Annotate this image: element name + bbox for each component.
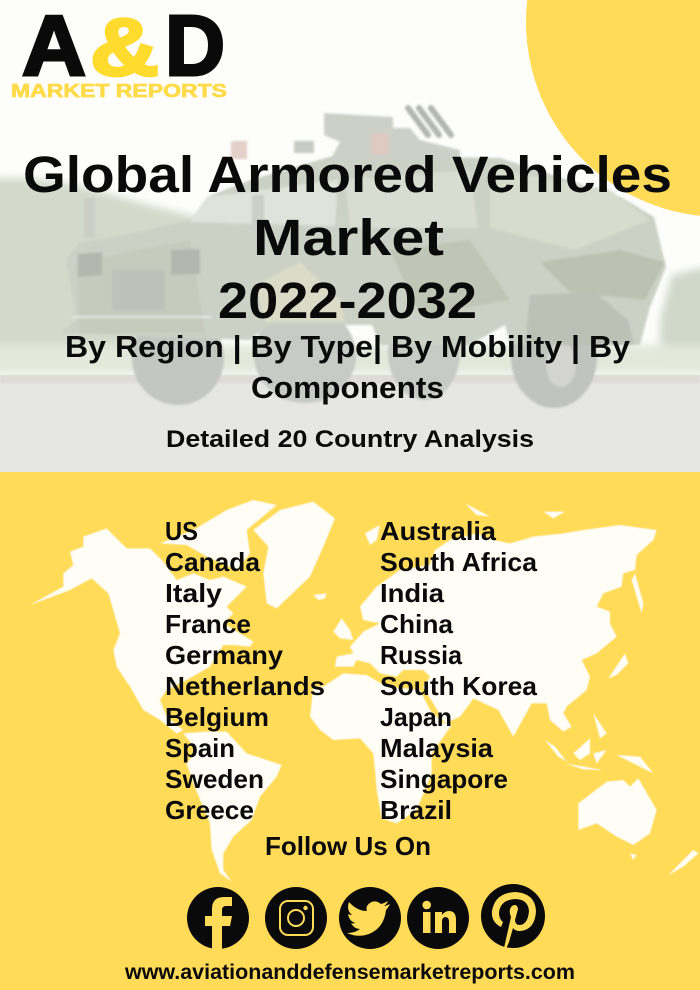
logo: A&D Market Reports [11,0,227,101]
country list: right column: Brazil [380,795,452,825]
country list: left column: Canada [165,547,261,577]
country list: right column: India [380,578,445,608]
country list: right column: Singapore [380,764,508,794]
country list: left column: Belgium [165,702,269,732]
logo: A&D Market Reports: & [90,2,159,93]
panel: faded vehicle photo background [0,0,700,472]
title: 2022-2032 [218,272,477,329]
country list: left column: Germany [165,640,284,670]
follow us heading: Follow Us On [265,831,431,861]
logo: A&D Market Reports: MARKET REPORTS [11,81,227,101]
icon: facebook [187,887,249,949]
title: Market [253,209,444,266]
country list: right column: Australia [380,516,497,546]
logo: A&D Market Reports: A [22,0,86,94]
country list: right column [380,516,538,825]
country list: left column: Spain [165,733,235,763]
icon: instagram [265,887,327,949]
logo: A&D Market Reports: D [165,0,225,94]
country list: left column: US [165,516,198,546]
eastern hemisphere [310,503,698,875]
subtitle: segments: Components [251,370,444,405]
country list: right column: Japan [380,702,452,732]
title [23,146,672,329]
panel: yellow lower section [0,472,700,990]
website url: www.aviationanddefensemarketreports.com [124,961,575,984]
country list: left column [165,516,325,825]
decorative yellow circle, top right [526,0,700,217]
icon: linkedin [407,887,469,949]
western hemisphere [30,500,353,882]
world map [30,500,698,882]
country list: right column: South Korea [380,671,538,701]
country list: left column: France [165,609,251,639]
detailed country analysis heading: Detailed 20 Country Analysis [166,426,534,453]
country list: left column: Italy [165,578,223,608]
country list: left column: Netherlands [165,671,325,701]
country list: right column: China [380,609,454,639]
subtitle: segments [65,329,631,405]
icon: pinterest [481,884,545,949]
country list: right column: Russia [380,640,463,670]
country list: right column: Malaysia [380,733,494,763]
icon: twitter [339,887,401,949]
country list: left column: Greece [165,795,254,825]
subtitle: segments: By Region | By Type| By Mobility | By [65,329,631,364]
title: Global Armored Vehicles [23,146,672,203]
vehicle illustration [60,108,666,408]
country list: right column: South Africa [380,547,538,577]
country list: left column: Sweden [165,764,264,794]
